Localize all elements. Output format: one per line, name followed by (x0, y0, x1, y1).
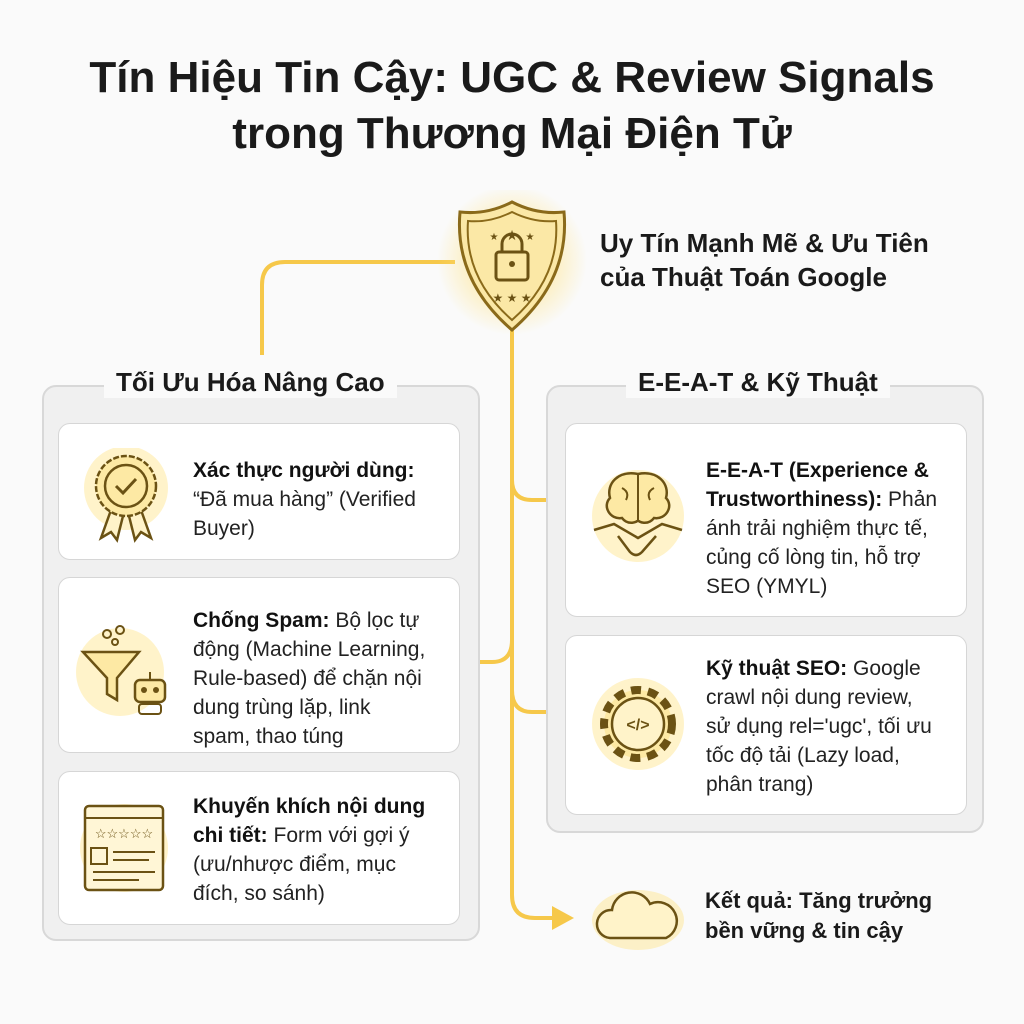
title (89, 53, 935, 158)
panel: left (42, 385, 480, 941)
text: Chống Spam: Bộ lọc tự (193, 609, 419, 632)
panel: right (546, 385, 984, 833)
text: tốc độ tải (Lazy load, (706, 744, 900, 767)
shield label: của Thuật Toán Google (600, 262, 887, 292)
text: động (Machine Learning, (193, 638, 425, 661)
text: E-E-A-T (Experience & (706, 459, 929, 482)
text: crawl nội dung review, (706, 686, 913, 709)
left heading: Tối Ưu Hóa Nâng Cao (116, 367, 385, 397)
card: eeat (565, 423, 967, 617)
right heading: E-E-A-T & Kỹ Thuật (638, 367, 878, 397)
text: Khuyến khích nội dung (193, 795, 425, 818)
text (706, 459, 937, 598)
icon: badge (84, 448, 168, 543)
result text: bền vững & tin cậy (705, 918, 903, 943)
text: Rule-based) để chặn nội (193, 667, 422, 690)
title: trong Thương Mại Điện Tử (232, 109, 792, 158)
icon: review form (80, 804, 168, 892)
shield label (600, 228, 929, 292)
shield label: Uy Tín Mạnh Mẽ & Ưu Tiên (600, 228, 929, 258)
icon: shield: ★ (506, 227, 518, 243)
text: chi tiết: Form với gợi ý (193, 824, 410, 847)
icon: brain handshake (592, 470, 684, 562)
text (706, 657, 932, 796)
icon: cloud (592, 890, 684, 950)
icon: gear code: </> (626, 717, 650, 734)
text (193, 609, 425, 748)
text: đích, so sánh) (193, 882, 325, 905)
icon: shield: ★ (490, 232, 499, 243)
icon: funnel robot (76, 625, 166, 716)
text (193, 459, 416, 540)
text: ánh trải nghiệm thực tế, (706, 517, 928, 540)
card: detailed content (58, 771, 460, 925)
text: (ưu/nhược điểm, mục (193, 853, 396, 876)
icon: review form: ☆☆☆☆☆ (95, 826, 153, 841)
text: dung trùng lặp, link (193, 696, 370, 719)
icon: shield: ★ (526, 232, 535, 243)
icon: shield: ★ ★ ★ (493, 291, 531, 305)
result text (705, 888, 932, 943)
card: seo (565, 635, 967, 815)
text: Trustworthiness): Phản (706, 488, 937, 511)
text: “Đã mua hàng” (Verified (193, 488, 416, 511)
text: phân trang) (706, 773, 813, 796)
title: Tín Hiệu Tin Cậy: UGC & Review Signals (89, 53, 935, 102)
text: SEO (YMYL) (706, 575, 827, 598)
text: Kỹ thuật SEO: Google (706, 657, 921, 680)
text: Buyer) (193, 517, 255, 540)
result text: Kết quả: Tăng trưởng (705, 888, 932, 913)
text: củng cố lòng tin, hỗ trợ (706, 546, 921, 569)
card: spam (58, 577, 460, 753)
text: sử dụng rel='ugc', tối ưu (706, 715, 932, 738)
card: verified (58, 423, 460, 560)
text (193, 795, 425, 905)
text: spam, thao túng (193, 725, 344, 748)
icon: shield (442, 190, 582, 332)
icon: gear code (592, 678, 684, 770)
text: Xác thực người dùng: (193, 459, 415, 482)
